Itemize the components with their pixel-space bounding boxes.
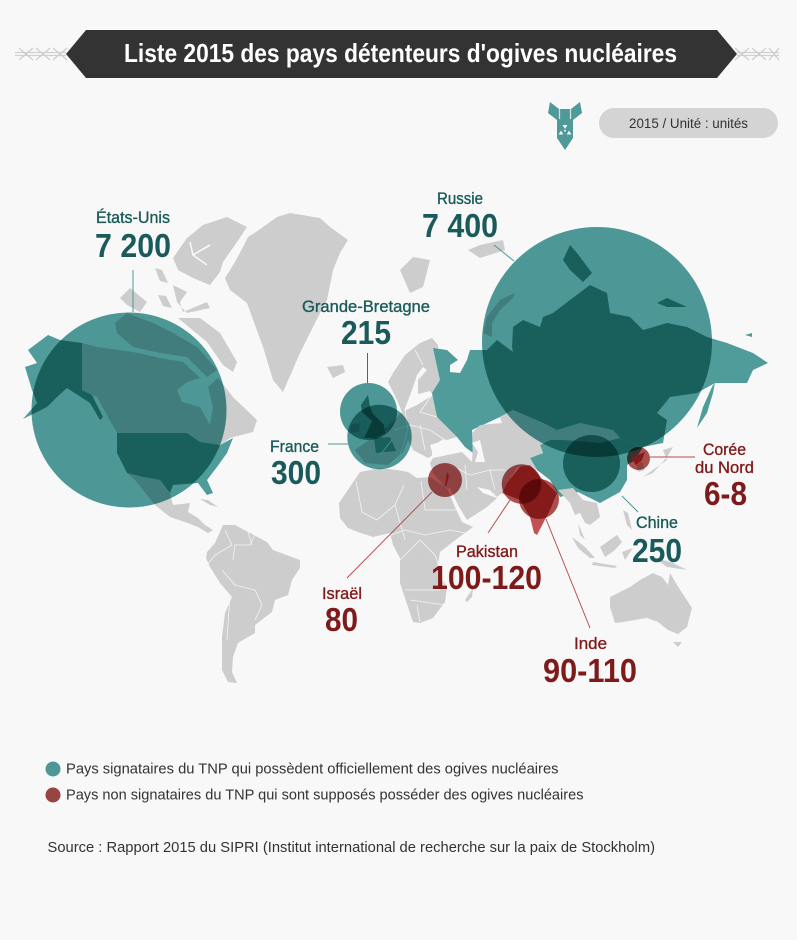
ireland — [350, 423, 360, 433]
label: Israël: Israël — [322, 584, 362, 603]
label: Pakistan: Pakistan — [456, 542, 518, 561]
world map — [23, 213, 768, 683]
source: Source : Rapport 2015 du SIPRI (Institut international de recherche sur la paix de Stockholm) — [48, 840, 655, 856]
bubble: Pakistan — [502, 464, 541, 504]
label: Russie: 7 400 — [422, 207, 498, 244]
novaya zemlya — [483, 293, 515, 337]
label: Grande-Bretagne — [302, 297, 430, 383]
black sea — [432, 439, 468, 456]
label: Pakistan — [431, 500, 542, 596]
mexico and central america — [127, 473, 213, 533]
label: Israël — [322, 492, 432, 638]
north korea land — [631, 452, 645, 465]
barbed wire right — [735, 48, 779, 60]
unit pill — [599, 108, 778, 138]
bubble: Inde — [519, 479, 559, 519]
label: Corée du Nord: Corée — [703, 440, 746, 459]
contiguous USA — [117, 433, 233, 495]
baltic sea — [404, 367, 433, 411]
bubble: États-Unis — [32, 312, 226, 508]
label: États-Unis — [95, 208, 171, 312]
africa — [339, 468, 473, 623]
france — [374, 437, 396, 453]
label: Chine: Chine — [636, 513, 678, 532]
label: Russie: Russie — [437, 189, 483, 208]
label: Inde — [543, 519, 637, 689]
greenland — [225, 213, 348, 392]
madagascar — [465, 588, 473, 602]
label: Grande-Bretagne: Grande-Bretagne — [302, 297, 430, 316]
bubble: France — [347, 405, 412, 469]
label: Pakistan: 100-120 — [431, 559, 542, 596]
label: Chine: 250 — [632, 532, 682, 569]
channels of Ellesmere island — [190, 242, 210, 265]
china — [530, 423, 643, 503]
bubble: Grande-Bretagne — [340, 383, 397, 440]
iceland — [327, 365, 345, 378]
label: Corée du Nord: du Nord — [695, 458, 754, 477]
label: France: France — [270, 437, 319, 456]
bubble: Chine — [563, 435, 620, 492]
unit pill: 2015 / Unité : unités — [629, 116, 748, 131]
pakistan land — [502, 465, 537, 500]
hudson bay — [177, 378, 218, 425]
label: Inde: Inde — [574, 634, 607, 653]
icon: nuclear bomb — [548, 102, 582, 150]
label: Grande-Bretagne: 215 — [341, 314, 391, 351]
caspian sea — [472, 440, 485, 462]
legend item: signatories: Pays signataires du TNP qui possèdent officiellement des ogives nucléaires — [66, 762, 558, 778]
bubble: Russie — [482, 227, 712, 457]
label: Inde: 90-110 — [543, 652, 637, 689]
south america — [206, 525, 300, 683]
middle east and central asia — [430, 410, 563, 520]
country borders — [207, 350, 505, 640]
mongolia — [557, 423, 620, 443]
israel land — [445, 472, 449, 487]
alaska — [23, 335, 103, 420]
russian arctic islands and sakhalin — [563, 245, 752, 428]
southeast asia — [558, 488, 687, 570]
title banner — [66, 30, 737, 78]
australia — [610, 573, 692, 634]
bubble: Corée du Nord — [627, 447, 650, 470]
svalbard and franz josef land — [400, 240, 505, 293]
europe — [355, 338, 457, 465]
cuba — [200, 499, 218, 507]
label: États-Unis: 7 200 — [95, 227, 171, 264]
label: France — [270, 437, 349, 491]
legend item: non-signatories: Pays non signataires du TNP qui sont supposés posséder des ogives nucléaires — [66, 788, 584, 804]
arctic islands of Canada — [115, 217, 247, 377]
label: Russie — [422, 189, 514, 261]
label: Corée du Nord: 6-8 — [704, 475, 747, 512]
south korea — [636, 461, 645, 472]
label: France: 300 — [271, 454, 321, 491]
title banner: Liste 2015 des pays détenteurs d'ogives nucléaires — [124, 38, 677, 68]
tasmania — [673, 642, 682, 647]
barbed wire left — [15, 48, 67, 60]
bubble: Israël — [428, 463, 462, 497]
united kingdom — [361, 395, 385, 438]
legend — [46, 762, 584, 804]
label: Israël: 80 — [325, 601, 358, 638]
canada — [82, 343, 257, 445]
label: États-Unis: États-Unis — [96, 208, 170, 227]
label: Chine — [622, 496, 682, 569]
japan — [643, 447, 673, 477]
label: Corée du Nord — [650, 440, 754, 512]
russia — [432, 285, 768, 453]
india land — [520, 473, 557, 535]
